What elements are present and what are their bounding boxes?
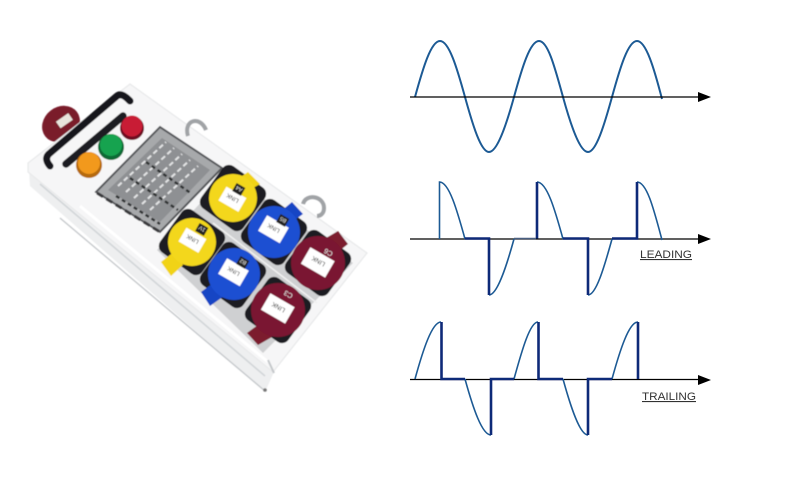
label: leading: LEADING xyxy=(640,249,692,261)
socket: red C6: C6 xyxy=(323,246,334,257)
indicator strip xyxy=(66,116,123,164)
socket: blue B5: LINK xyxy=(267,221,281,233)
socket: red C6 xyxy=(291,231,348,290)
socket: yellow 1V: LINK xyxy=(186,232,200,244)
panel divider xyxy=(213,223,317,303)
socket backing plates xyxy=(156,162,354,346)
icon: red mushroom button xyxy=(35,98,87,150)
photo: power distribution box xyxy=(28,84,367,392)
icon: right hook xyxy=(303,197,324,216)
icon: green indicator light xyxy=(98,134,124,160)
socket: red C6: LINK xyxy=(310,254,327,267)
socket: blue B5: B5 xyxy=(279,215,288,223)
socket: yellow A4: LINK xyxy=(226,191,240,203)
socket: yellow 1V: 1V xyxy=(198,224,207,232)
socket: blue B2: LINK xyxy=(227,264,241,276)
socket: red C3: C3 xyxy=(283,288,294,299)
socket: blue B2: B2 xyxy=(239,257,248,265)
icon: upper hook xyxy=(187,121,206,136)
box rail front edge xyxy=(29,170,274,392)
box top face xyxy=(28,84,367,372)
socket: red C3 xyxy=(247,283,305,345)
label: trailing: TRAILING xyxy=(642,391,696,403)
socket: yellow A4: A4 xyxy=(235,184,244,192)
socket: blue B2 xyxy=(201,248,260,306)
chart: trailing-edge waveform xyxy=(410,322,711,435)
transparent breaker cover xyxy=(96,127,222,232)
icon: orange indicator light xyxy=(76,152,102,178)
icon: red indicator light xyxy=(120,116,144,140)
socket panel base xyxy=(157,173,353,353)
rail shading lines xyxy=(40,184,274,392)
handle xyxy=(47,95,130,166)
chart: full sine wave xyxy=(410,41,711,152)
socket: yellow 1V xyxy=(161,218,216,276)
socket: red C3: LINK xyxy=(270,300,287,313)
socket: blue B5 xyxy=(248,202,303,258)
socket: yellow A4 xyxy=(209,172,260,222)
chart: leading-edge waveform xyxy=(410,182,711,295)
